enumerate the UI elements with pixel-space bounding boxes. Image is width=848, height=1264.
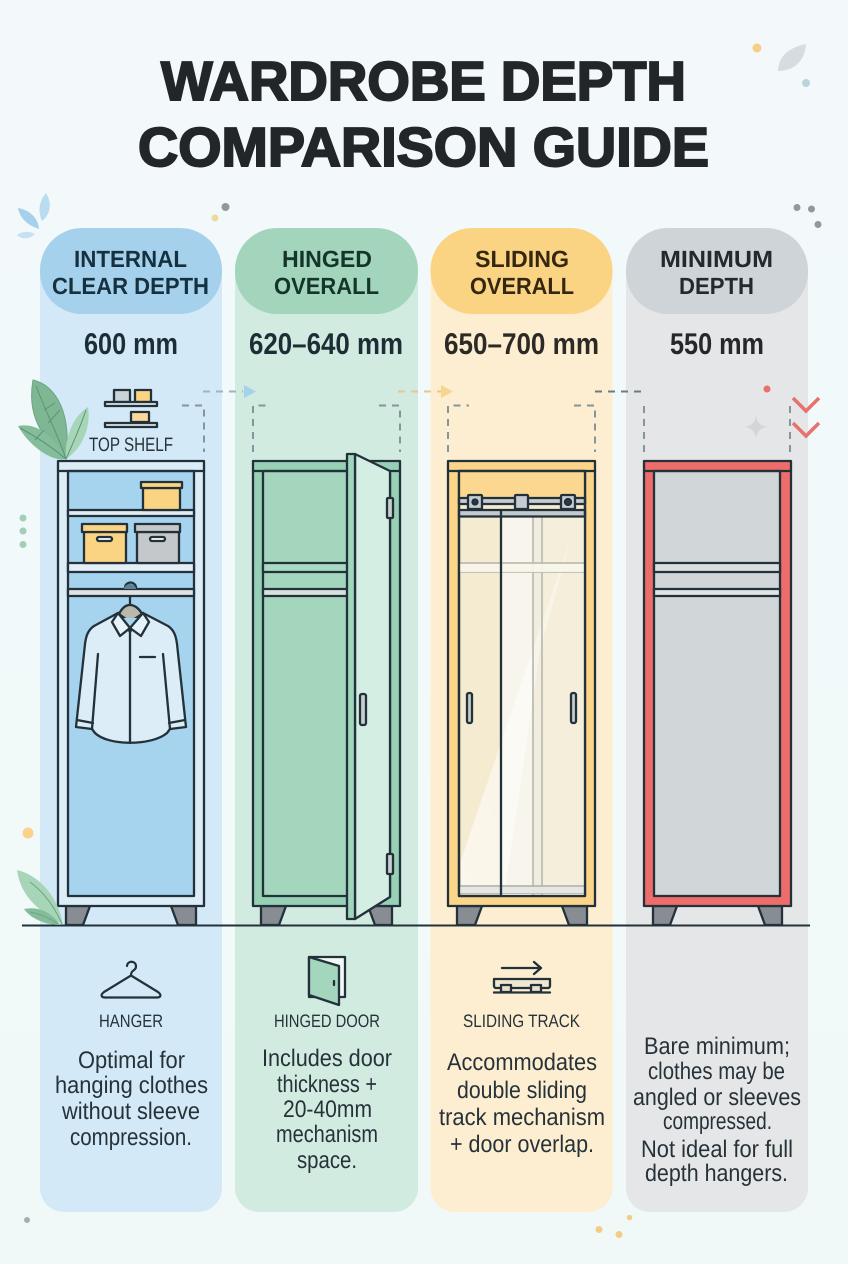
open door leaf — [347, 454, 393, 919]
description: hinged door: space. — [297, 1147, 357, 1174]
description: hanger: without sleeve — [61, 1098, 200, 1125]
icon: hinged door — [274, 957, 380, 1031]
description: minimum depth: compressed. — [663, 1108, 772, 1135]
description: minimum depth — [633, 1033, 801, 1187]
icon: sliding track — [463, 962, 580, 1031]
title — [138, 50, 709, 178]
description: hinged door: thickness + — [277, 1071, 377, 1098]
panel: sliding overall — [430, 228, 612, 1212]
value: 550 mm: 550 mm — [670, 328, 764, 361]
ground line — [22, 924, 810, 926]
heading: hinged overall — [235, 228, 418, 314]
sliding track rollers — [468, 495, 575, 509]
heading: sliding overall: OVERALL — [470, 273, 574, 299]
value: 600 mm: 600 mm — [84, 328, 178, 361]
heading: sliding overall — [430, 228, 612, 314]
panel: minimum depth — [626, 228, 808, 1212]
icon: top shelf: TOP SHELF — [89, 434, 173, 456]
heading: minimum depth: MINIMUM — [660, 246, 773, 272]
description: hanger: Optimal for — [78, 1047, 185, 1074]
wardrobe: internal clear depth with shelves and shirt — [58, 461, 204, 925]
heading: internal clear depth: CLEAR DEPTH — [52, 273, 209, 299]
icon: sliding track: SLIDING TRACK — [463, 1011, 580, 1031]
wardrobe: minimum depth — [644, 461, 791, 925]
wardrobe: sliding doors — [448, 461, 595, 925]
panel: hinged overall — [235, 228, 418, 1212]
icon: hinged door: HINGED DOOR — [274, 1011, 380, 1031]
sliding door glare — [461, 535, 572, 890]
value: 620–640 mm: 620–640 mm — [249, 328, 403, 361]
icon: blue leaves — [17, 193, 50, 238]
description: minimum depth: depth hangers. — [645, 1160, 788, 1187]
heading: internal clear depth: INTERNAL — [74, 246, 187, 272]
description: sliding track: double sliding — [457, 1077, 587, 1104]
description: minimum depth: Bare minimum; — [644, 1033, 790, 1060]
icon: red warning chevrons — [764, 386, 819, 436]
icon: small green leaves — [17, 870, 63, 925]
description: hinged door: mechanism — [276, 1121, 378, 1148]
description: sliding track: + door overlap. — [450, 1131, 594, 1158]
shirt on hanger — [68, 582, 194, 743]
heading: internal clear depth — [40, 228, 222, 314]
heading: minimum depth: DEPTH — [679, 273, 754, 299]
dimension guides and arrows — [182, 385, 790, 452]
value: 650–700 mm: 650–700 mm — [444, 328, 599, 361]
description: sliding track: track mechanism — [439, 1104, 605, 1131]
title: WARDROBE DEPTH — [161, 50, 686, 112]
heading: minimum depth — [626, 228, 808, 314]
description: minimum depth: clothes may be — [648, 1058, 785, 1085]
description: hanger — [55, 1047, 208, 1151]
title: COMPARISON GUIDE — [138, 116, 709, 178]
description: hanger: compression. — [70, 1124, 192, 1151]
icon: hanger — [99, 962, 163, 1031]
description: minimum depth: Not ideal for full — [641, 1136, 793, 1163]
description: hanger: hanging clothes — [55, 1072, 208, 1099]
wardrobe: hinged door open — [253, 454, 400, 925]
heading: hinged overall: HINGED — [282, 246, 372, 272]
storage boxes — [82, 482, 182, 563]
description: sliding track: Accommodates — [447, 1049, 597, 1076]
icon: top shelf — [89, 390, 173, 456]
description: sliding track — [439, 1049, 605, 1158]
description: hinged door: Includes door — [262, 1045, 392, 1072]
description: hinged door: 20-40mm — [283, 1096, 372, 1123]
heading: sliding overall: SLIDING — [475, 246, 569, 272]
icon: sparkle — [744, 415, 768, 439]
description: minimum depth: angled or sleeves — [633, 1084, 801, 1111]
panel: internal clear depth — [40, 228, 222, 1212]
icon: large green leaves — [18, 380, 89, 459]
heading: hinged overall: OVERALL — [274, 273, 379, 299]
description: hinged door — [262, 1045, 392, 1174]
icon: hanger: HANGER — [99, 1011, 163, 1031]
icon: grey leaf — [778, 44, 806, 71]
